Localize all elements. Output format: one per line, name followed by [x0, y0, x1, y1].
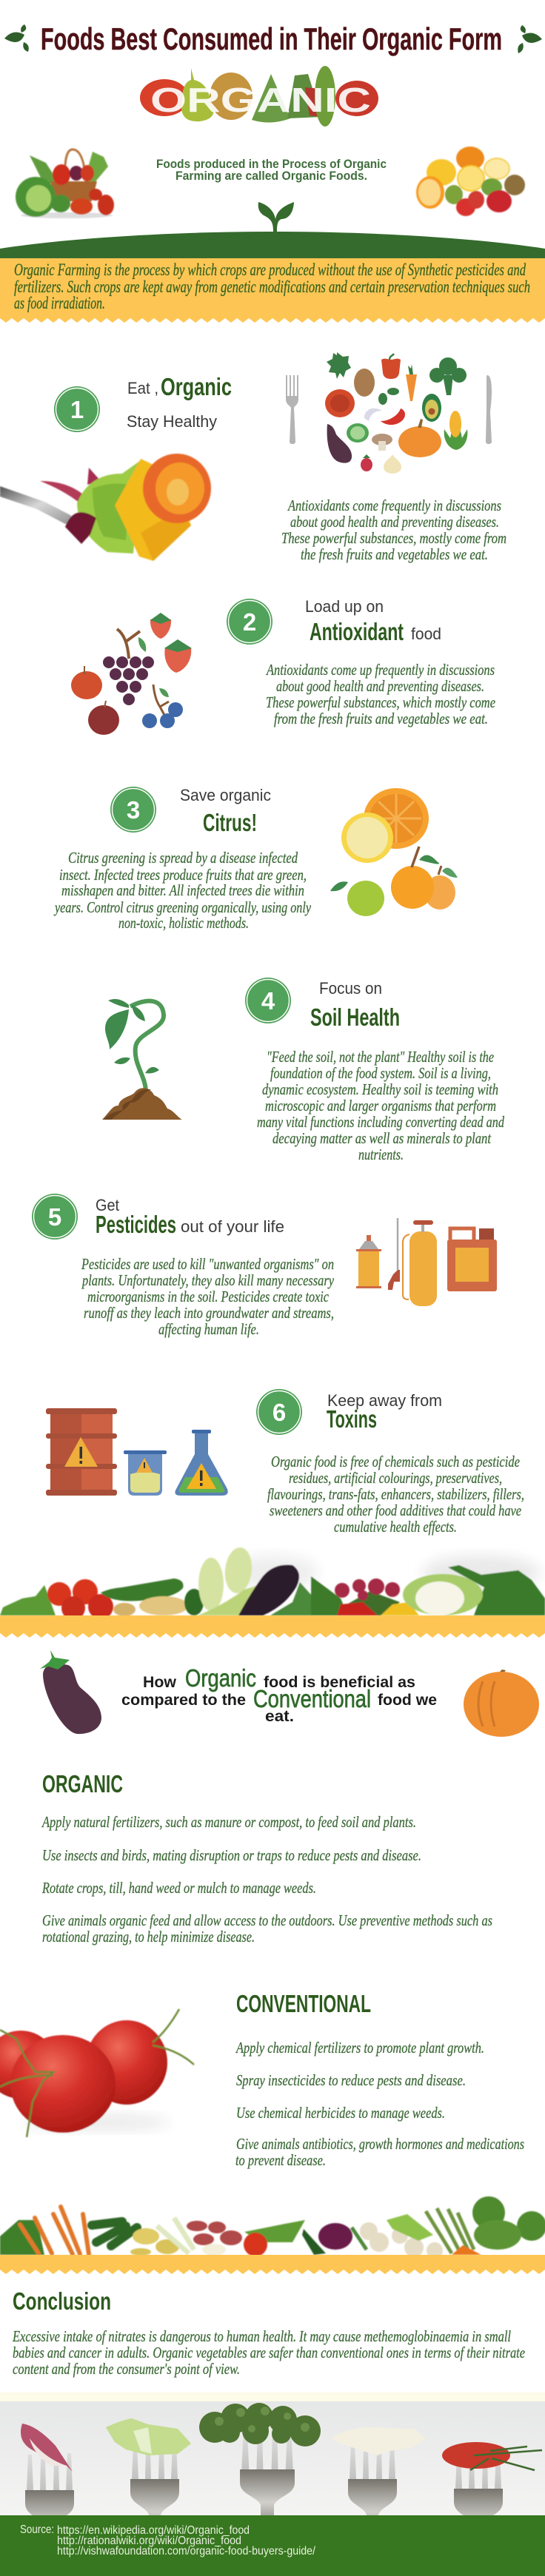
- green hill: [0, 232, 545, 258]
- source links: http://vishwafoundation.com/organic-food-buyers-guide/: [57, 2545, 315, 2557]
- organic list text: Rotate crops, till, hand weed or mulch to manage weeds.: [41, 1879, 316, 1897]
- icon: citrus fruits: [330, 788, 458, 916]
- heading 1: [127, 373, 232, 431]
- zigzag edge two: [0, 1632, 545, 1638]
- text 2: from the fresh fruits and vegetables we eat.: [274, 710, 488, 727]
- comparison heading text: Organic: [185, 1664, 256, 1692]
- badge 6: 6: [272, 1399, 286, 1426]
- section 5: pesticides: [32, 1194, 497, 1338]
- text 3: [53, 849, 312, 932]
- icon: sprout: [258, 202, 294, 232]
- text 2: about good health and preventing diseases.: [276, 677, 484, 695]
- heading 2: [305, 597, 441, 645]
- heading 3: Save organic: [180, 786, 271, 804]
- comparison heading text: eat.: [265, 1708, 294, 1725]
- comparison heading text: [121, 1664, 437, 1725]
- heading 5: Get: [96, 1196, 119, 1214]
- intro text: as food irradiation.: [14, 294, 105, 312]
- heading 1: Organic: [161, 373, 232, 400]
- conclusion text: content and from the consumer's point of view.: [13, 2360, 240, 2378]
- icon: toxic barrel and flasks: [46, 1408, 228, 1496]
- badge 2: [227, 599, 272, 645]
- title: [4, 21, 542, 56]
- panel: yellow intro band: [0, 258, 545, 323]
- comparison heading text: Conventional: [253, 1685, 371, 1712]
- heading 6: Keep away from: [327, 1391, 442, 1410]
- heading 5: [96, 1196, 284, 1238]
- panel: yellow band three: [0, 2255, 545, 2274]
- ORGANIC vegetable lettering: ORGANIC: [150, 81, 371, 119]
- text 5: Pesticides are used to kill "unwanted organisms" on: [81, 1255, 334, 1273]
- icon: berries and fruit: [71, 613, 192, 735]
- badge 3: 3: [127, 796, 140, 824]
- section 6: toxins: [46, 1389, 524, 1536]
- heading 6: Toxins: [327, 1405, 377, 1433]
- organic list text: Apply natural fertilizers, such as manure or compost, to feed soil and plants.: [41, 1813, 416, 1831]
- icon: plate of vegetables: [286, 352, 492, 474]
- badge 4: [245, 978, 291, 1023]
- heading 3: [180, 786, 271, 836]
- comparison heading text: food is beneficial as: [264, 1674, 415, 1691]
- comparison heading text: food we: [378, 1692, 437, 1709]
- conventional heading: CONVENTIONAL: [236, 1990, 371, 2017]
- heading 6: [327, 1391, 442, 1433]
- text 5: plants. Unfortunately, they also kill many necessary: [81, 1271, 335, 1289]
- comparison heading text: compared to the: [121, 1692, 246, 1709]
- section 4: soil health: [102, 978, 504, 1163]
- conventional list text: [235, 2039, 524, 2169]
- section: comparison heading: [40, 1650, 539, 1737]
- heading 1: Eat ,: [127, 379, 158, 397]
- text 4: [257, 1048, 504, 1163]
- text 4: decaying matter as well as minerals to plant: [272, 1129, 492, 1147]
- image: tomatoes: [0, 2009, 194, 2137]
- organic list text: rotational grazing, to help minimize disease.: [42, 1928, 255, 1946]
- text 5: [81, 1255, 335, 1338]
- heading 5: out of your life: [181, 1217, 284, 1236]
- text: definition of organic foods: Foods produced in the Process of Organic: [156, 157, 387, 171]
- text 3: misshapen and bitter. All infected trees die within: [61, 881, 304, 899]
- footer: sources: [0, 2515, 545, 2576]
- text 1: the fresh fruits and vegetables we eat.: [301, 545, 488, 563]
- fork three with broccoli: [199, 2403, 321, 2524]
- heading 4: Focus on: [319, 979, 382, 998]
- organic list text: Use insects and birds, mating disruption or traps to reduce pests and disease.: [42, 1846, 421, 1864]
- fork five with tomato: [442, 2442, 542, 2543]
- text 1: [281, 497, 506, 563]
- badge 4: 4: [261, 987, 275, 1015]
- conventional list text: to prevent disease.: [235, 2151, 326, 2169]
- organic list text: [41, 1813, 492, 1946]
- image: vegetable strip two: [0, 2196, 545, 2259]
- conventional list text: Use chemical herbicides to manage weeds.: [236, 2104, 445, 2122]
- source links: https://en.wikipedia.org/wiki/Organic_food: [57, 2524, 250, 2537]
- heading 4: [310, 979, 400, 1031]
- fork two with lettuce: [106, 2418, 191, 2534]
- section 3: citrus: [53, 786, 458, 932]
- badge 6: [256, 1389, 302, 1435]
- text 3: insect. Infected trees produce fruits that are green,: [59, 866, 307, 884]
- text 3: Citrus greening is spread by a disease infected: [68, 849, 298, 867]
- icon: left leaves: [4, 24, 29, 52]
- image: citrus and fruit pile: [416, 147, 525, 216]
- image: vegetable strip one: [0, 1546, 545, 1620]
- ORGANIC vegetable lettering: [140, 66, 378, 127]
- text 4: nutrients.: [358, 1146, 404, 1163]
- image: vegetable basket: [16, 149, 114, 218]
- image: salad on a fork: [0, 454, 211, 561]
- conclusion heading: Conclusion: [13, 2287, 111, 2315]
- text: definition of organic foods: [156, 157, 387, 183]
- badge 3: [110, 787, 156, 833]
- text: definition of organic foods: Farming are called Organic Foods.: [175, 169, 367, 183]
- text 5: microorganisms in the soil. Pesticides create toxic: [87, 1288, 330, 1305]
- text 6: [267, 1453, 524, 1536]
- section 2: antioxidant food: [71, 597, 495, 735]
- icon: pumpkin: [464, 1669, 539, 1737]
- icon: right leaves: [518, 25, 542, 53]
- heading 2: Load up on: [305, 597, 384, 616]
- section: conclusion: [12, 2287, 525, 2378]
- badge 5: [32, 1194, 78, 1240]
- text 2: [265, 661, 495, 727]
- heading 2: Antioxidant: [310, 618, 404, 645]
- heading 5: Pesticides: [96, 1211, 176, 1238]
- conventional list text: Apply chemical fertilizers to promote plant growth.: [235, 2039, 484, 2057]
- fork one with radicchio: [21, 2424, 74, 2545]
- panel: yellow band two: [0, 1615, 545, 1638]
- badge 2: 2: [243, 608, 256, 636]
- icon: pesticide sprayers: [356, 1218, 497, 1306]
- heading 4: Soil Health: [310, 1003, 400, 1031]
- text 3: non-toxic, holistic methods.: [118, 914, 249, 932]
- text 5: affecting human life.: [158, 1320, 259, 1338]
- section: organic list: [41, 1770, 492, 1946]
- text 3: years. Control citrus greening organically, using only: [53, 898, 312, 916]
- text 6: cumulative health effects.: [334, 1518, 457, 1536]
- zigzag edge: [0, 317, 545, 323]
- text 5: runoff as they leach into groundwater and streams,: [84, 1304, 334, 1322]
- conclusion text: [12, 2327, 525, 2378]
- organic heading: ORGANIC: [42, 1770, 123, 1798]
- badge 1: 1: [70, 396, 84, 423]
- heading 2: food: [411, 625, 441, 643]
- zigzag edge three: [0, 2269, 545, 2274]
- heading 1: Stay Healthy: [127, 412, 217, 431]
- pale band: [0, 2392, 545, 2401]
- badge 1: [54, 386, 100, 432]
- comparison heading text: How: [143, 1674, 177, 1691]
- icon: eggplant: [40, 1650, 101, 1734]
- source links: http://rationalwiki.org/wiki/Organic_food: [57, 2535, 241, 2547]
- conventional list text: Spray insecticides to reduce pests and disease.: [236, 2071, 466, 2089]
- heading 3: Citrus!: [203, 809, 257, 836]
- badge 5: 5: [48, 1203, 61, 1231]
- fork four with cauliflower: [331, 2427, 426, 2534]
- source label: Source:: [20, 2523, 54, 2536]
- intro text: [14, 260, 530, 312]
- source links: [57, 2524, 315, 2557]
- section 1: eat organic: [0, 352, 506, 563]
- image: vegetables on forks: [0, 2401, 545, 2545]
- section: conventional list: [235, 1990, 524, 2169]
- icon: seedling in soil: [102, 999, 182, 1120]
